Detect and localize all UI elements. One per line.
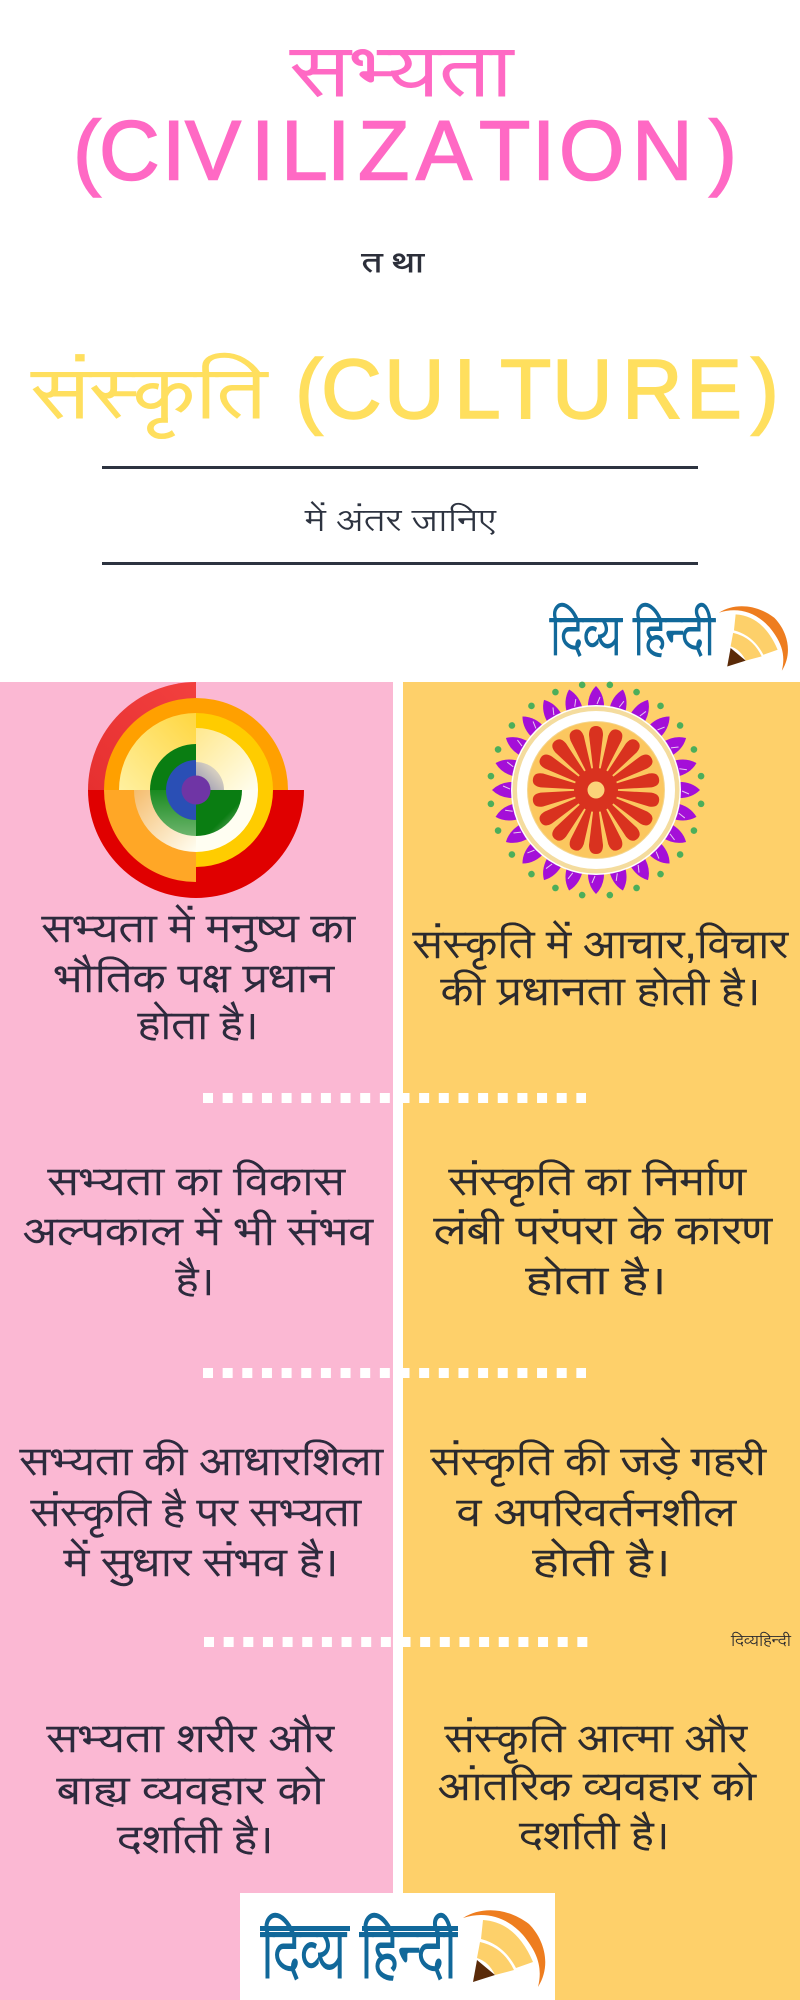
text: civilization point 2: अल्पकाल में भी संभव (23, 1207, 374, 1254)
text: civilization point 4: दर्शाती है। (117, 1815, 273, 1862)
title: culture (31, 342, 779, 439)
text: civilization point 3: में सुधार संभव है। (63, 1538, 338, 1586)
text: culture point 2: लंबी परंपरा के कारण (433, 1206, 773, 1253)
text: culture point 4: आंतरिक व्यवहार को (438, 1762, 757, 1809)
text: civilization point 1: सभ्यता में मनुष्य का (41, 904, 356, 952)
divider top (102, 466, 698, 469)
text: civilization point 2: सभ्यता का विकास (47, 1159, 346, 1204)
top logo: दिव्य हिन्दी (549, 602, 716, 667)
text: civilization point 4: सभ्यता शरीर और (46, 1714, 335, 1761)
bottom logo: दिव्य हिन्दी (260, 1912, 458, 1993)
text: civilization point 3: संस्कृति है पर सभ्यता (30, 1488, 362, 1538)
divider bottom (102, 562, 698, 565)
text: culture point 3: होती है। (532, 1538, 670, 1585)
dotted divider 2 (203, 1368, 586, 1378)
text: civilization point 3: सभ्यता की आधारशिला (19, 1439, 384, 1484)
icon: pencil logo large (463, 1910, 545, 1987)
text: culture point 1: की प्रधानता होती है। (440, 967, 760, 1014)
text: culture point 4: दर्शाती है। (519, 1811, 669, 1858)
icon: concentric segmented circle (88, 682, 304, 898)
text: culture point 4: संस्कृति आत्मा और (444, 1714, 748, 1764)
small watermark: दिव्यहिन्दी (730, 1632, 792, 1650)
subtitle: में अंतर जानिए (304, 500, 498, 538)
text: culture point 3 (430, 1437, 767, 1585)
text: civilization point 1: भौतिक पक्ष प्रधान (54, 954, 336, 1001)
text: culture point 1: संस्कृति में आचार,विचार (412, 920, 789, 970)
panel: culture background (403, 682, 800, 2000)
title: civilization: सभ्यता (290, 33, 515, 111)
text: culture point 4 (438, 1714, 757, 1858)
icon: mandala (487, 681, 705, 899)
text: culture point 3: व अपरिवर्तनशील (456, 1490, 737, 1535)
text: civilization point 4 (46, 1714, 335, 1862)
text: culture point 3: संस्कृति की जड़े गहरी (430, 1437, 767, 1487)
text: culture point 2 (433, 1159, 773, 1303)
title: civilization (73, 33, 737, 198)
text: civilization point 4: बाह्य व्यवहार को (56, 1766, 325, 1813)
icon: pencil logo (719, 606, 788, 671)
text: civilization point 3 (19, 1439, 384, 1586)
text: civilization point 1: होता है। (137, 1001, 258, 1048)
text: culture point 2: संस्कृति का निर्माण (448, 1159, 747, 1207)
text: civilization point 2 (23, 1159, 374, 1304)
title: culture: संस्कृति (31, 352, 269, 439)
text: civilization point 1 (41, 904, 356, 1048)
text: culture point 1 (412, 920, 789, 1014)
dotted divider 3 (204, 1637, 588, 1647)
title: civilization: (CIVILIZATION) (73, 104, 737, 198)
panel: civilization background (0, 682, 393, 2000)
connector word: त था (361, 248, 425, 278)
dotted divider 1 (203, 1093, 586, 1103)
bottom logo (240, 1893, 555, 2000)
text: culture point 2: होता है। (525, 1256, 666, 1303)
title: culture: (CULTURE) (295, 342, 779, 436)
text: civilization point 2: है। (175, 1257, 214, 1304)
